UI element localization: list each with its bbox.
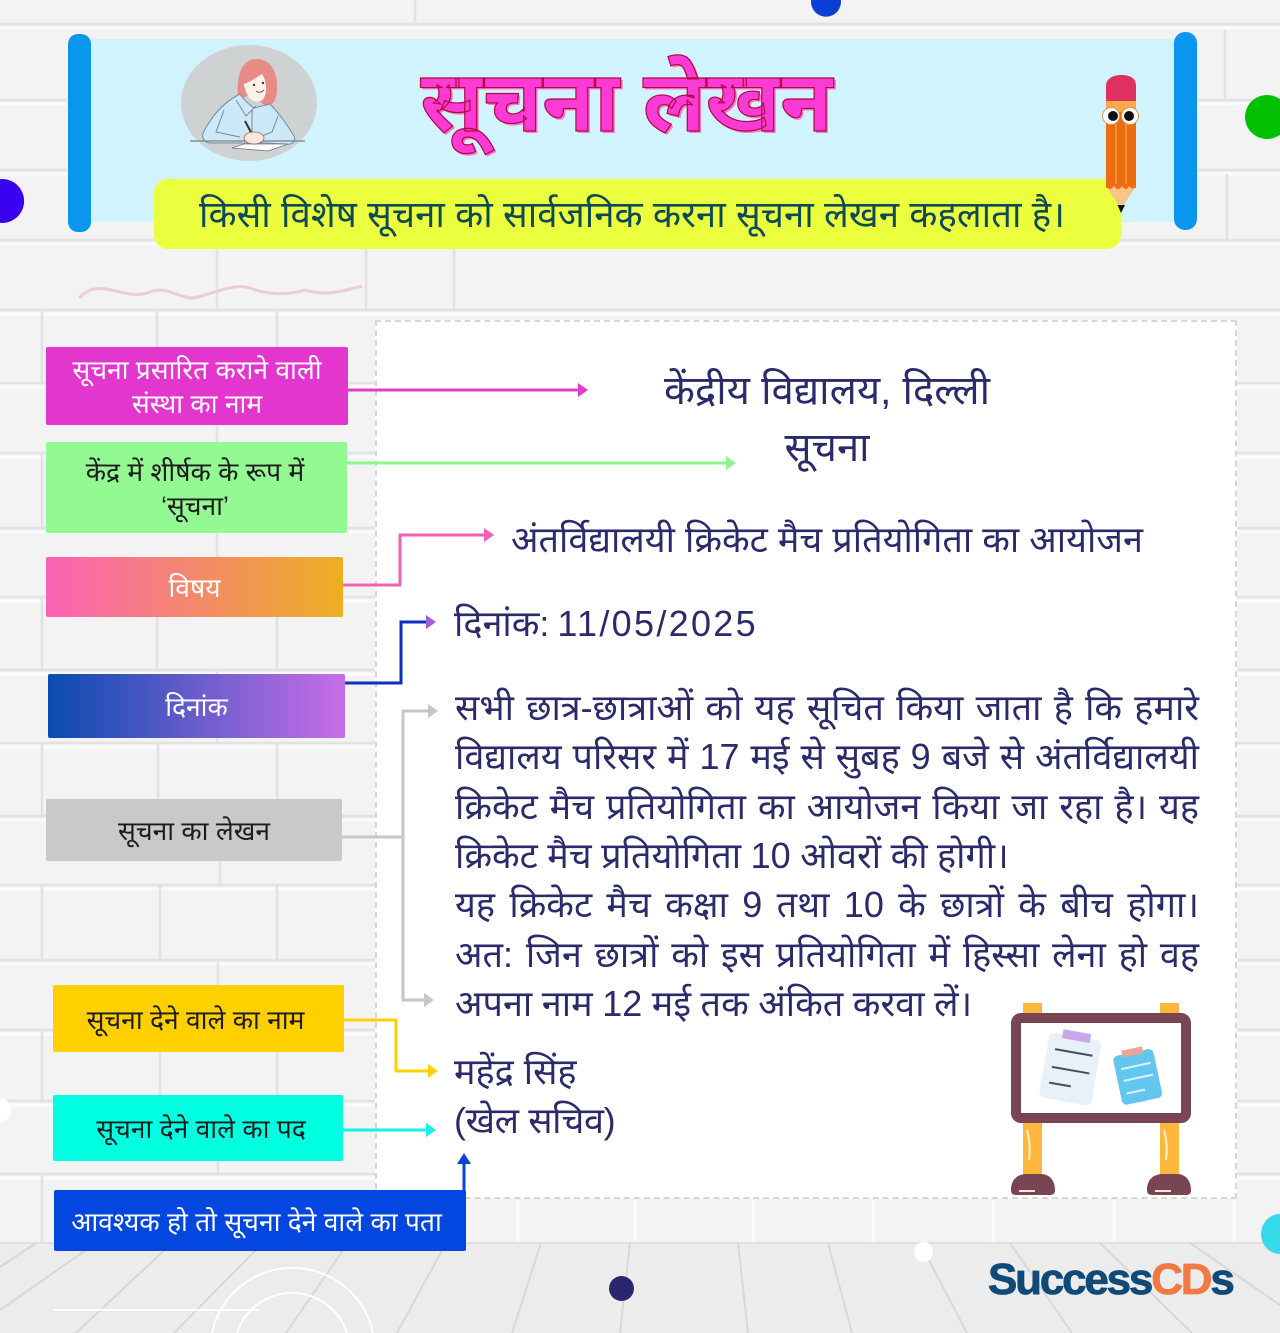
decor: white dot left: [0, 1098, 11, 1122]
logo: SuccessCDs: SuccessCDs: [988, 1255, 1233, 1304]
decor: green dot right: [1245, 95, 1280, 139]
label: date: [48, 674, 345, 738]
notice: body text: विद्यालय परिसर में 17 मई से सुबह 9 बजे से अंतर्विद्यालयी: [455, 736, 1199, 777]
notice: body text: अत: जिन छात्रों को इस प्रतियोगिता में हिस्सा लेना हो वह: [455, 934, 1199, 975]
notice: body text: क्रिकेट मैच प्रतियोगिता 10 ओवरों की होगी।: [455, 835, 1009, 876]
label: organisation name: सूचना प्रसारित कराने वाली: [72, 355, 322, 385]
notice: school name: केंद्रीय विद्यालय, दिल्ली: [664, 368, 990, 413]
decor: cyan dot right: [1261, 1214, 1280, 1254]
label: heading in centre: [46, 442, 347, 533]
notice: signatory: महेंद्र सिंह: [454, 1051, 577, 1092]
notice: body text: यह क्रिकेट मैच कक्षा 9 तथा 10 के छात्रों के बीच होगा।: [455, 884, 1199, 925]
label: sender address: आवश्यक हो तो सूचना देने वाले का पता: [71, 1206, 442, 1236]
label: heading in centre: केंद्र में शीर्षक के रूप में: [86, 456, 304, 486]
decor: violet dot left: [0, 179, 24, 223]
notice: body text: अपना नाम 12 मई तक अंकित करवा लें।: [455, 983, 972, 1024]
header banner: [85, 39, 1185, 222]
banner right roller: [1174, 32, 1197, 230]
icon: pencil character: [1102, 75, 1139, 213]
banner left roller: [68, 34, 91, 232]
label: organisation name: संस्था का नाम: [132, 389, 262, 419]
notice: date: दिनांक: 11/05/2025: [454, 603, 758, 644]
notice: signatory: [454, 1051, 615, 1141]
label: notice writing: [46, 799, 342, 861]
label: heading in centre: ‘सूचना’: [161, 490, 229, 520]
label: sender name: सूचना देने वाले का नाम: [87, 1004, 304, 1034]
panel: notice sheet: [375, 320, 1237, 1199]
notice: signatory: (खेल सचिव): [454, 1100, 615, 1141]
notice: subject: अंतर्विद्यालयी क्रिकेट मैच प्रतियोगिता का आयोजन: [511, 519, 1143, 560]
label: notice writing: सूचना का लेखन: [118, 816, 270, 846]
decor: navy dot floor: [609, 1276, 634, 1301]
notice: body text: सभी छात्र-छात्राओं को यह सूचित किया जाता है कि हमारे: [455, 687, 1199, 728]
notice: body text: [455, 687, 1200, 1024]
label: date: दिनांक: [165, 692, 228, 722]
decor: blue dot top: [811, 0, 841, 17]
icon: woman writing: [181, 45, 317, 161]
icon: notice board: [1011, 1003, 1191, 1195]
decor: white dot floor: [914, 1242, 933, 1262]
label: subject: विषय: [168, 573, 221, 603]
label: subject: [46, 557, 343, 617]
label: sender name: [53, 985, 344, 1052]
label: organisation name: [46, 347, 348, 425]
notice: body text: क्रिकेट मैच प्रतियोगिता का आयोजन किया जा रहा है। यह: [455, 786, 1199, 827]
definition text: किसी विशेष सूचना को सार्वजनिक करना सूचना लेखन कहलाता है।: [199, 194, 1065, 235]
label: sender designation: सूचना देने वाले का पद: [96, 1114, 306, 1144]
notice: heading: सूचना: [784, 426, 870, 470]
label: sender designation: [53, 1095, 343, 1161]
definition strip: [154, 179, 1121, 249]
label: sender address: [54, 1190, 466, 1251]
title: सूचना लेखन: [420, 55, 832, 150]
